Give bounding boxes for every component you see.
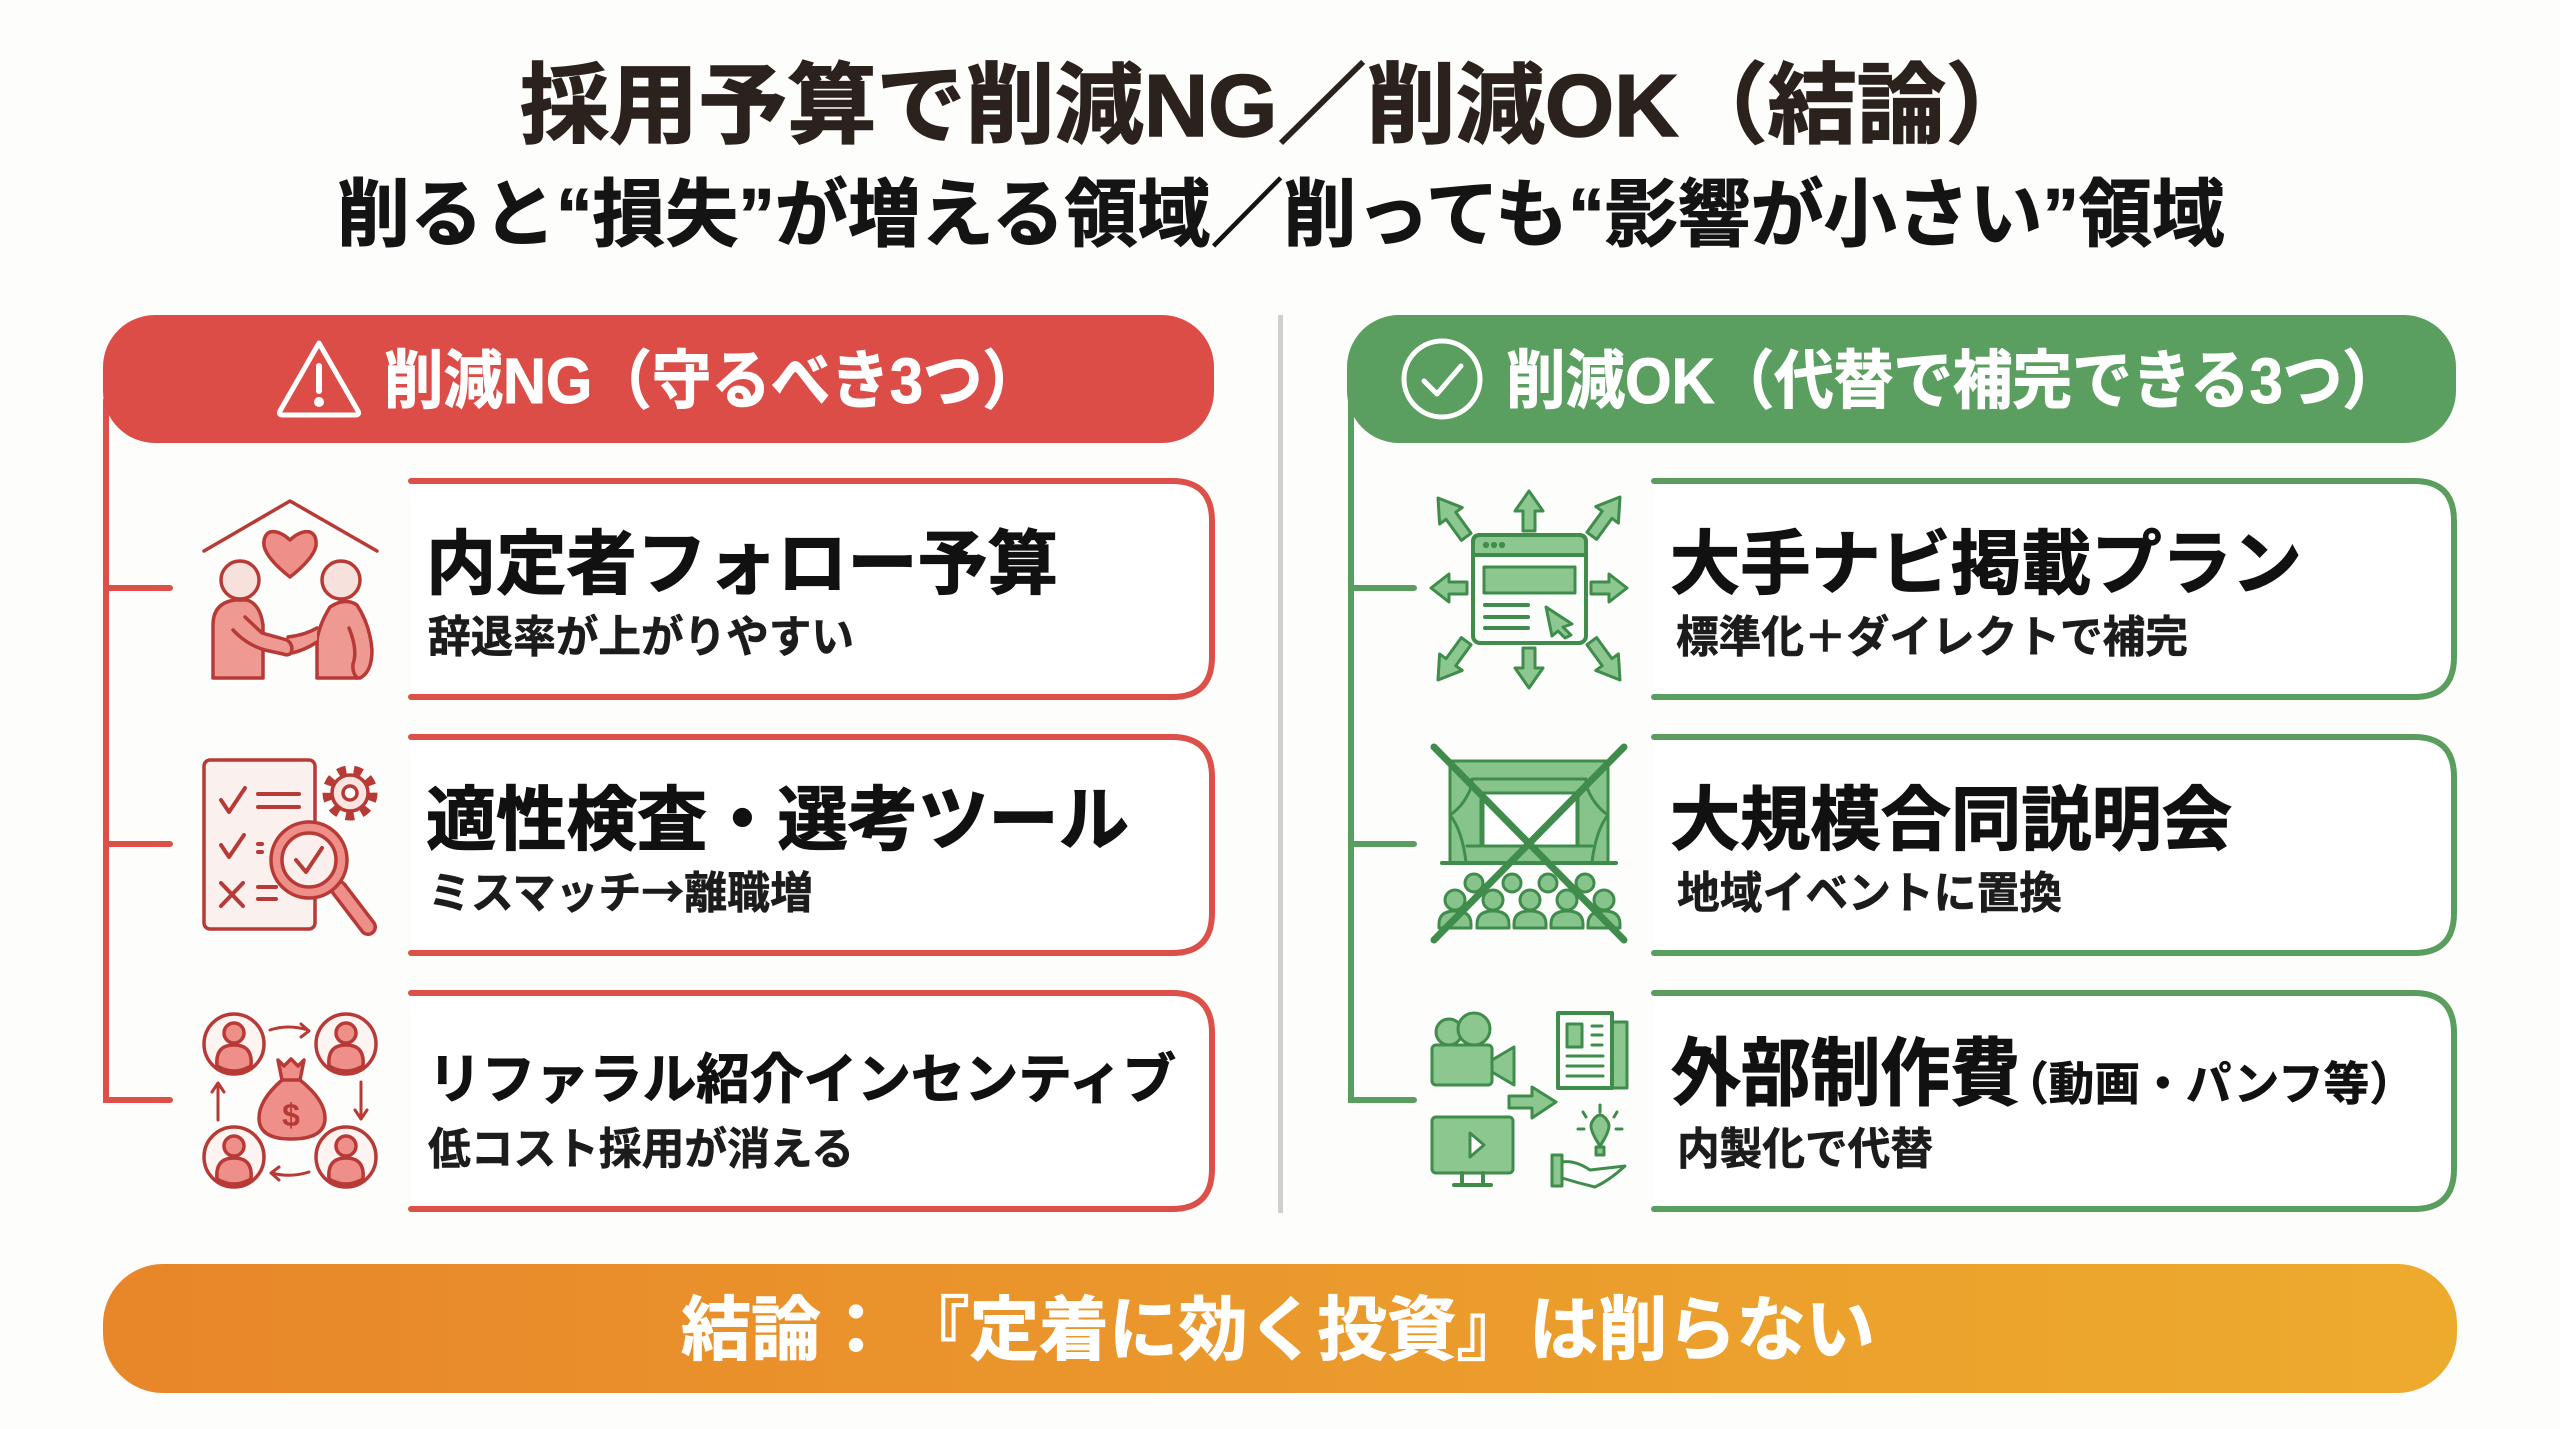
icon: checklist with magnifier and gear — [204, 760, 372, 929]
item description: 地域イベントに置換 — [1677, 869, 2062, 918]
item heading: 内定者フォロー予算 — [426, 525, 1058, 603]
item description: 標準化＋ダイレクトで補完 — [1676, 613, 2188, 662]
item description: 辞退率が上がりやすい — [428, 613, 854, 662]
conclusion text: end: は削らない — [1529, 1291, 1875, 1369]
icon: referral cycle with money bag — [204, 1014, 376, 1187]
heading bar: 削減NG — [103, 315, 1214, 443]
icon: camera, brochure, video and idea hand — [1432, 1013, 1627, 1187]
title: 採用予算で削減NG／削減OK（結論） — [520, 56, 2035, 155]
item description: 内製化で代替 — [1677, 1125, 1933, 1174]
icon: dollar mark: $ — [282, 1097, 300, 1133]
card: 内定者フォロー予算 — [204, 481, 1212, 697]
item heading: リファラル紹介インセンティブ — [428, 1050, 1176, 1110]
panel: 削減NG — [103, 315, 1214, 1209]
item heading: 適性検査・選考ツール — [426, 781, 1129, 859]
icon: crossed-out seminar stage — [1434, 747, 1624, 940]
icon: check circle — [1404, 341, 1480, 417]
item heading: 大規模合同説明会 — [1670, 781, 2232, 859]
item heading note: （動画・パンフ等） — [2003, 1058, 2415, 1110]
panel: 削減OK — [1347, 315, 2456, 1209]
item description: ミスマッチ→離職増 — [428, 857, 813, 921]
item description: 低コスト採用が消える — [428, 1125, 854, 1174]
tree connector: red — [106, 400, 170, 1100]
conclusion text: quote: 『定着に効く投資』 — [900, 1291, 1526, 1369]
icon: web page with radiating arrows — [1427, 489, 1631, 688]
center divider — [1278, 315, 1283, 1213]
tree connector: green — [1351, 400, 1414, 1100]
item heading: 大手ナビ掲載プラン — [1670, 525, 2302, 603]
heading bar: 削減OK — [1347, 315, 2456, 443]
subtitle: 削ると“損失”が増える領域／削っても“影響が小さい”領域 — [337, 173, 2225, 256]
icon: house with handshake — [204, 501, 377, 678]
item heading: 外部制作費 — [1671, 1032, 2020, 1115]
card: 大手ナビ掲載プラン — [1427, 481, 2454, 697]
card: 適性検査・選考ツール — [204, 737, 1212, 953]
card: 外部制作費 — [1432, 993, 2454, 1209]
card: リファラル紹介インセンティブ — [204, 993, 1212, 1209]
conclusion text: lead: 結論： — [681, 1291, 891, 1369]
heading text: 削減OK（代替で補完できる3つ） — [1506, 345, 2402, 417]
icon: warning triangle — [279, 343, 359, 415]
conclusion banner — [103, 1264, 2457, 1393]
heading text: 削減NG（守るべき3つ） — [384, 345, 1042, 417]
card: 大規模合同説明会 — [1434, 737, 2454, 953]
